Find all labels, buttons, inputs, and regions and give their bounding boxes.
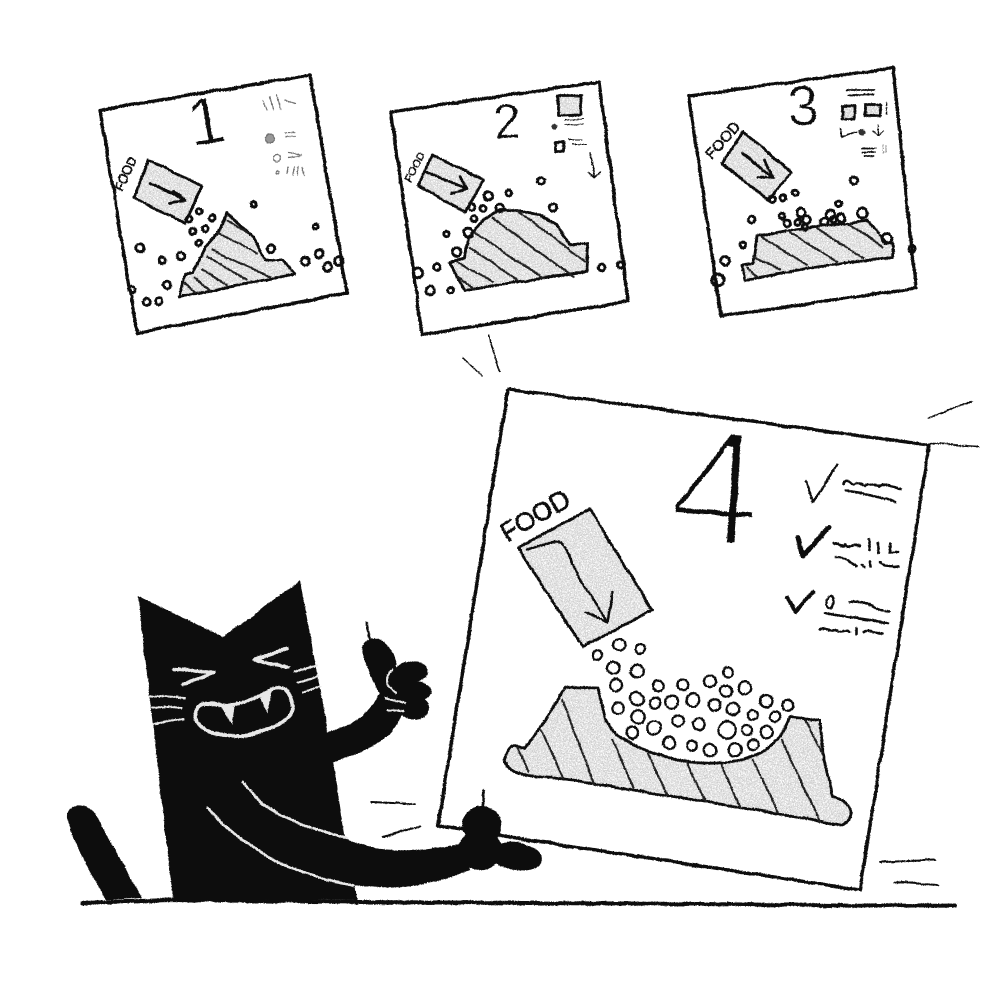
food pellets [413, 178, 623, 295]
hand finger tip [483, 790, 484, 808]
food bag [722, 132, 792, 200]
arm outline lines [208, 782, 353, 885]
striped mound [179, 213, 295, 297]
raised arm [326, 685, 404, 762]
food pellets [129, 201, 343, 305]
panel: step 2 [391, 82, 628, 335]
ground line [82, 900, 955, 906]
open mouth [195, 688, 292, 736]
striped mound [742, 220, 893, 280]
panel: step 3 [689, 68, 916, 316]
legend scribbles [552, 96, 600, 178]
number 4: 4 [664, 392, 768, 582]
fangs [220, 690, 272, 725]
food label: FOOD [112, 155, 139, 193]
cat body and face [138, 580, 431, 900]
food label: FOOD [702, 119, 744, 163]
number 1: 1 [181, 81, 231, 162]
cat arm holding card [208, 782, 544, 888]
food pellets [712, 176, 915, 286]
whiskers [150, 665, 320, 724]
panel: step 4 large card [438, 389, 929, 890]
striped mound [450, 210, 588, 290]
food bag [134, 160, 202, 223]
legend scribbles [841, 90, 886, 156]
striped mound [504, 687, 851, 825]
food label: FOOD [495, 484, 575, 547]
motion lines [371, 335, 978, 885]
cat tail [67, 805, 142, 900]
number 3: 3 [786, 73, 820, 138]
thumbs-up hand [362, 623, 431, 720]
checklist [787, 465, 900, 634]
panel: step 1 [100, 75, 347, 333]
laughing eyes [174, 649, 288, 685]
food bag [418, 155, 484, 212]
checklist scribbles [820, 481, 900, 634]
food pellets [592, 639, 794, 756]
legend scribbles [263, 95, 305, 175]
number 2: 2 [492, 95, 522, 150]
holding hand [458, 806, 544, 873]
food label: FOOD [403, 151, 428, 184]
food bag [518, 509, 652, 647]
